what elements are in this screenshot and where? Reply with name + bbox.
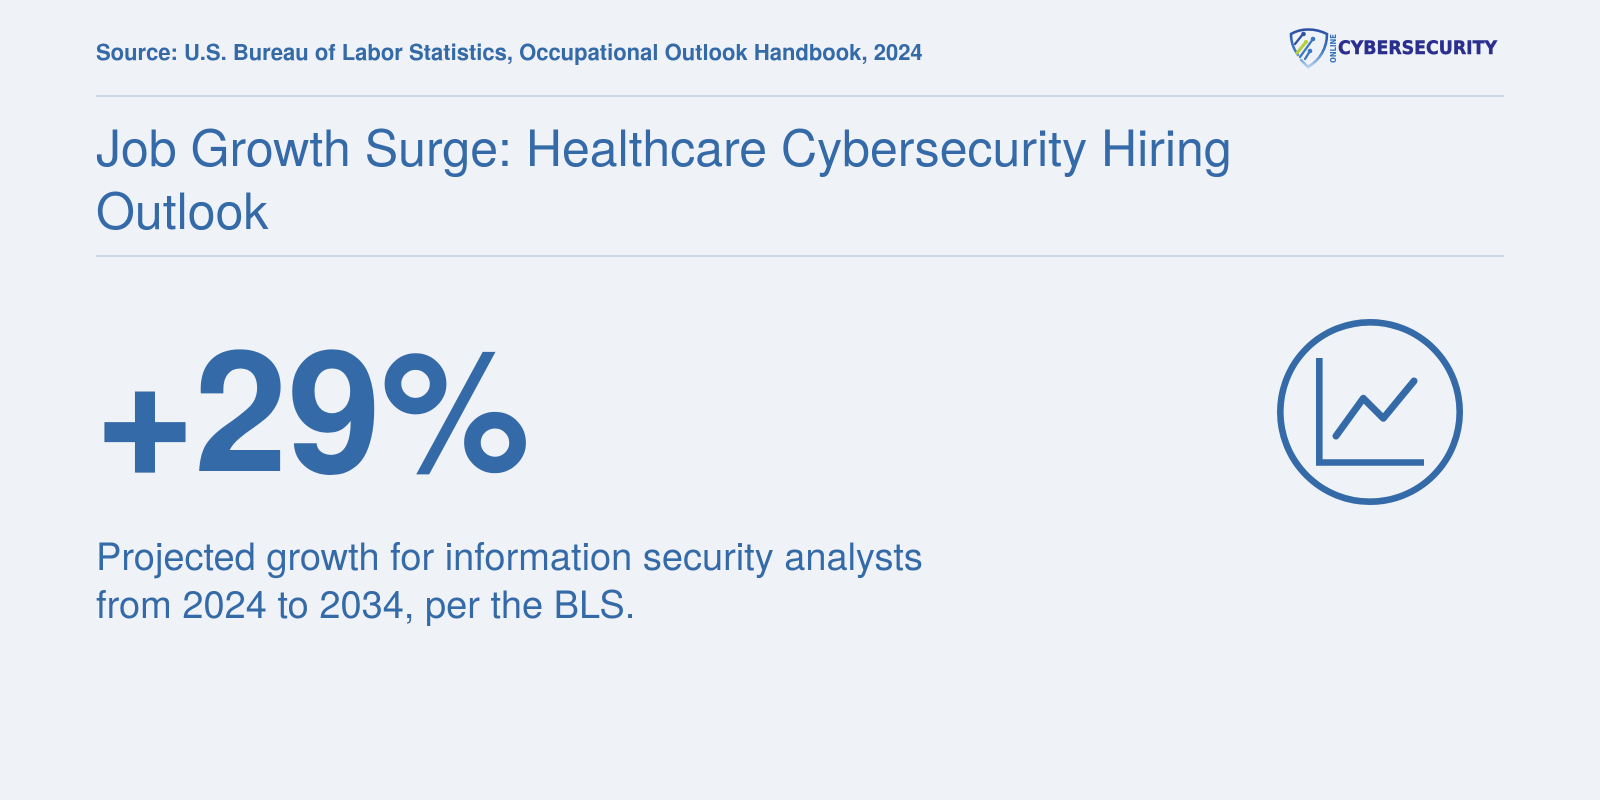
icon: line chart in circle	[1277, 319, 1463, 505]
logo: Online Cybersecurity	[1290, 28, 1498, 68]
source line: Source: U.S. Bureau of Labor Statistics, Occupational Outlook Handbook, 2024	[96, 35, 923, 67]
title: Outlook	[96, 172, 268, 244]
big stat: +29%	[96, 337, 530, 505]
icon: shield	[1291, 30, 1327, 67]
title	[96, 110, 1232, 244]
logo wordmark: online: ONLINE	[1329, 34, 1338, 63]
description: Projected growth for information security analysts	[96, 526, 923, 581]
description	[96, 526, 923, 629]
title: Job Growth Surge: Healthcare Cybersecurity Hiring	[96, 110, 1232, 181]
description: from 2024 to 2034, per the BLS.	[96, 574, 635, 629]
